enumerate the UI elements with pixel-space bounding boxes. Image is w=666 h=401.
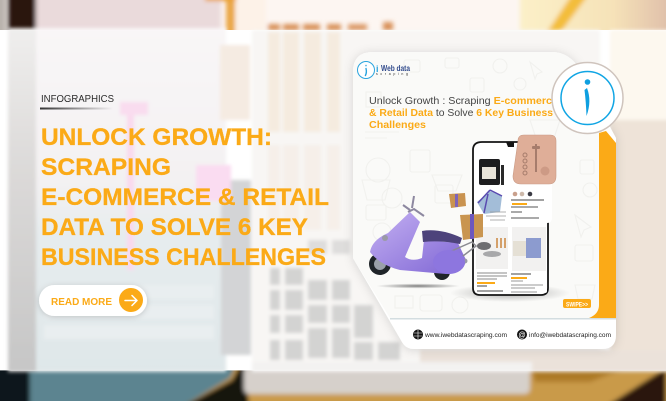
main title: E-COMMERCE & RETAIL — [41, 184, 329, 211]
card base — [353, 52, 616, 349]
icon: parcels — [449, 193, 483, 240]
read more button — [39, 285, 147, 316]
card heading — [369, 95, 558, 131]
circular brand badge — [552, 62, 623, 134]
card heading: Challenges — [369, 119, 426, 131]
logo — [358, 62, 410, 78]
listing: candle — [475, 151, 509, 222]
email contact: info@iwebdatascraping.com — [529, 332, 611, 339]
listing: toaster card — [510, 160, 552, 223]
website contact — [413, 330, 507, 340]
main title — [41, 124, 329, 271]
overlay edge — [0, 369, 666, 372]
card heading: & Retail Data to Solve 6 Key Business — [369, 107, 553, 119]
logo: scraping — [376, 72, 408, 76]
faint doodle pattern — [362, 58, 597, 313]
read more button: READ MORE — [51, 297, 112, 308]
swipe badge — [563, 299, 591, 308]
main title: BUSINESS CHALLENGES — [41, 244, 326, 271]
main title: DATA TO SOLVE 6 KEY — [41, 214, 308, 241]
email contact: @ — [518, 330, 526, 340]
main title: UNLOCK GROWTH: — [41, 124, 272, 151]
icon: arrow in circle — [119, 288, 143, 312]
orange side strip — [589, 131, 616, 318]
email contact — [517, 330, 611, 340]
listing: cookware — [475, 225, 509, 293]
logo: Web data — [381, 64, 410, 73]
section label — [40, 93, 114, 110]
section label: INFOGRAPHICS — [41, 93, 114, 105]
footer divider — [390, 318, 616, 320]
phone with product listings — [473, 142, 552, 295]
website contact: www.iwebdatascraping.com — [424, 332, 507, 339]
listing: scented candle — [510, 226, 547, 293]
card heading: Unlock Growth : Scraping E-commerce — [369, 95, 558, 107]
swipe badge: SWIPE>> — [566, 302, 588, 308]
main title: SCRAPING — [41, 154, 171, 181]
social card preview — [353, 52, 616, 349]
logo: i — [376, 64, 379, 74]
icon: ground shadows — [376, 284, 570, 302]
icon: purple scooter — [369, 196, 476, 280]
icon: toaster — [513, 135, 556, 184]
listing: gift box — [477, 190, 506, 220]
card content background — [353, 52, 599, 318]
